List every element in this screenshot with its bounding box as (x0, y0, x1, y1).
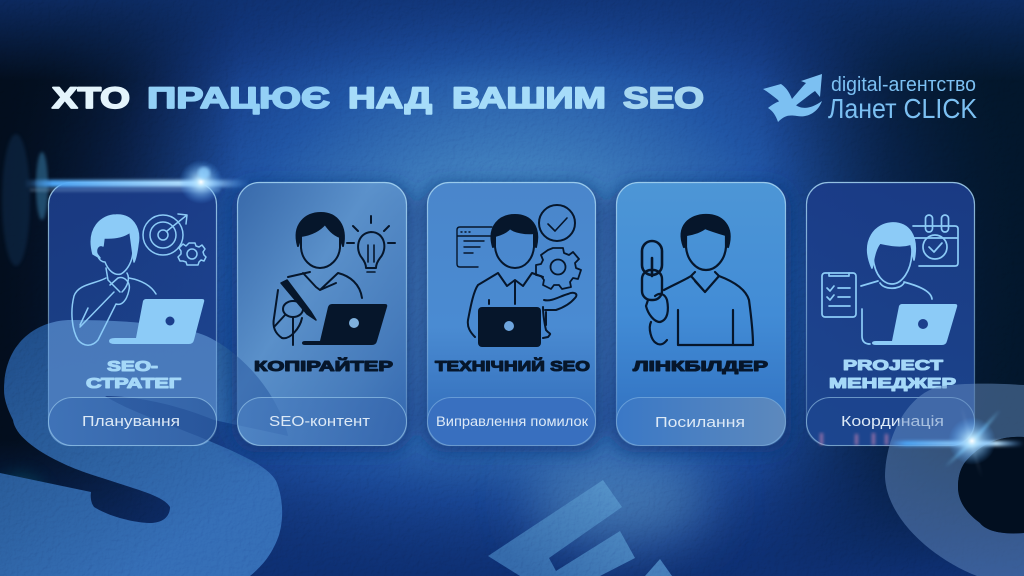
heading: КОПІРАЙТЕР (254, 357, 393, 375)
heading: ЛІНКБІЛДЕР (633, 358, 768, 375)
laptop (302, 304, 387, 345)
card shadows (232, 184, 791, 452)
left lens flare (2, 134, 48, 266)
card 4: лінкбілдер (616, 182, 786, 446)
head (492, 215, 537, 268)
gear (536, 248, 581, 289)
logo: digital-агентство (831, 74, 976, 96)
card 5: project менеджер (806, 182, 974, 446)
open hand (544, 293, 576, 325)
head (297, 213, 344, 268)
head (682, 215, 730, 270)
clipboard (822, 273, 856, 317)
pill: SEO-контент (269, 413, 370, 430)
title (52, 82, 704, 115)
pill: Планування (82, 413, 180, 430)
title: SEO (623, 82, 704, 115)
heading (86, 358, 182, 392)
title: ПРАЦЮЄ (147, 82, 330, 115)
title: НАД (348, 82, 432, 115)
laptop (872, 304, 957, 345)
icon: link builder (642, 215, 753, 345)
background letter S (0, 320, 288, 576)
right flare (820, 405, 1024, 478)
heading: PROJECT (843, 357, 943, 374)
background letter O (885, 384, 1024, 576)
bulb (347, 216, 395, 272)
card 1: SEO-стратег (48, 182, 218, 446)
logo (763, 74, 977, 124)
icon: technical SEO (457, 205, 581, 347)
pill (616, 398, 786, 446)
background letter E (488, 480, 672, 576)
laptop (478, 307, 541, 347)
icon: project manager (822, 215, 958, 345)
head (868, 223, 915, 288)
pill (238, 398, 406, 446)
icon: strategist (72, 214, 206, 345)
heading: СТРАТЕГ (86, 375, 182, 392)
pill: Посилання (655, 414, 745, 431)
head (91, 215, 139, 292)
body (273, 272, 362, 345)
pill: Виправлення помилок (436, 414, 588, 429)
logo: Ланет CLICK (828, 93, 977, 124)
hand (646, 294, 668, 344)
pill (428, 398, 596, 446)
card 2: копірайтер (236, 182, 408, 446)
title: ХТО (52, 82, 130, 115)
check circle (539, 205, 575, 241)
title: ВАШИМ (452, 82, 606, 115)
pill: Координація (841, 413, 944, 430)
logo icon (763, 74, 822, 122)
heading: ТЕХНІЧНИЙ SEO (435, 357, 590, 375)
icon: copywriter (273, 213, 395, 345)
body (861, 281, 932, 344)
chain (642, 241, 662, 300)
heading: МЕНЕДЖЕР (829, 375, 956, 392)
laptop (109, 299, 204, 344)
hand and pen (274, 280, 316, 338)
body (664, 272, 753, 345)
body and arm (72, 273, 156, 345)
pill (806, 398, 974, 446)
heading (829, 357, 956, 392)
left flare (25, 160, 250, 204)
heading: SEO- (107, 358, 158, 375)
target (143, 214, 187, 255)
body (468, 273, 550, 338)
card 3: технічний SEO (428, 182, 596, 446)
calendar (913, 215, 958, 266)
gear (178, 243, 206, 265)
window (457, 227, 492, 267)
pill (48, 398, 216, 446)
